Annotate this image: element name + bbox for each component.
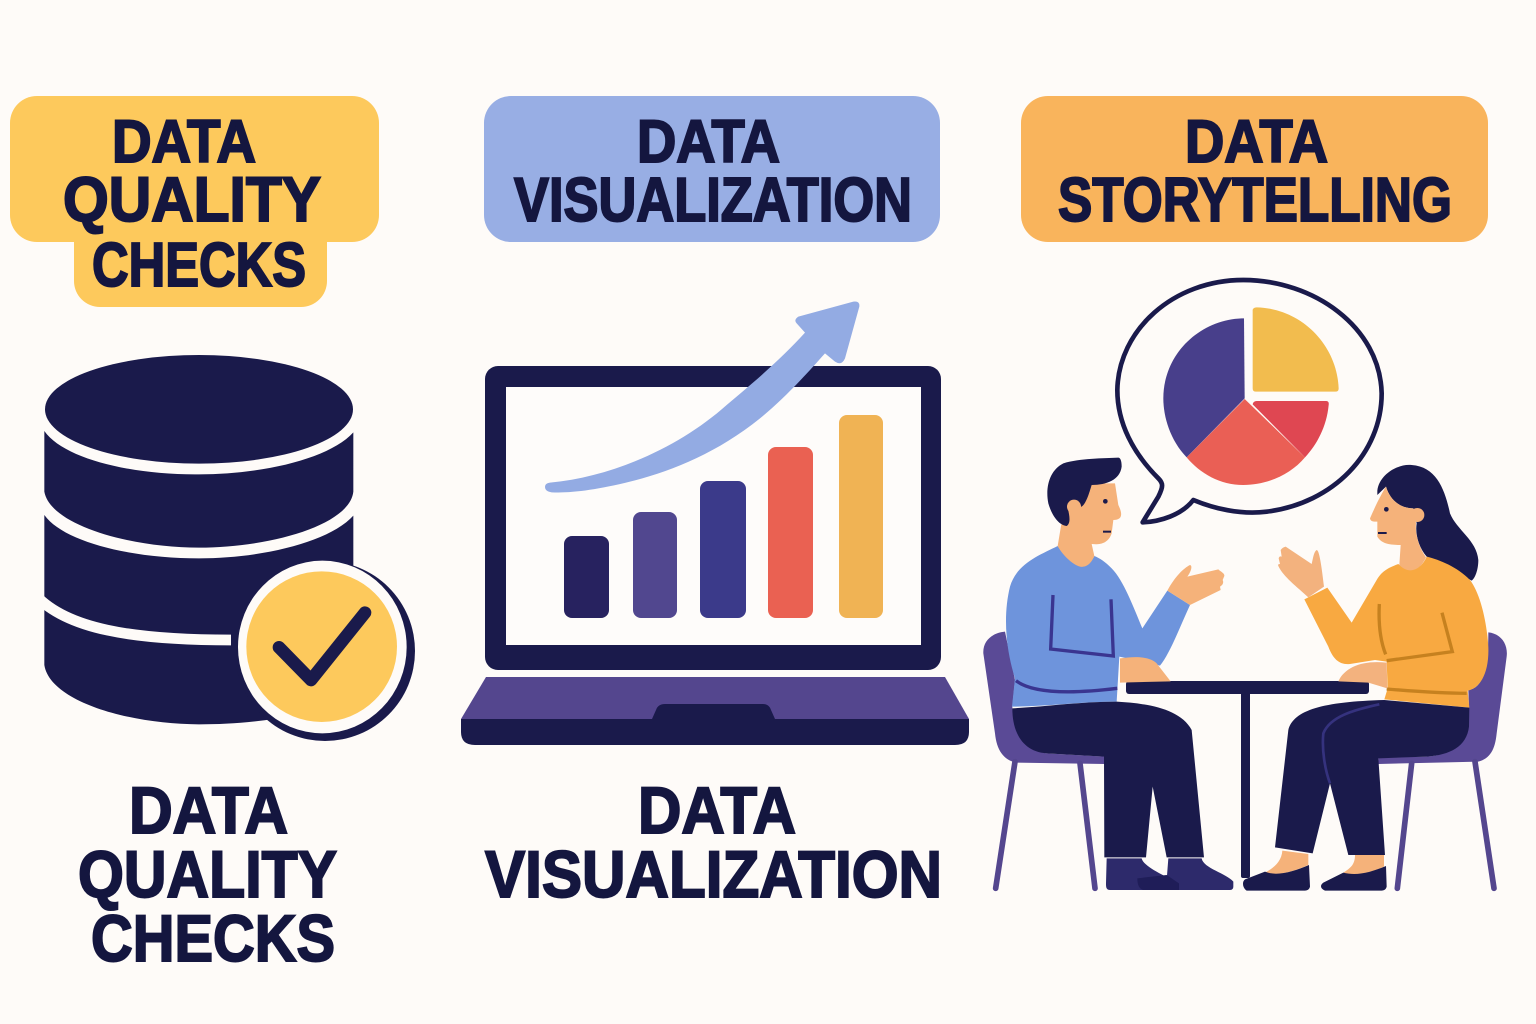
speech bubble with pie chart	[1117, 280, 1382, 522]
caption: data visualization: DATA	[638, 773, 796, 847]
heading badge: data storytelling: DATA	[1185, 108, 1328, 175]
heading badge: data quality checks: CHECKS	[92, 231, 306, 300]
heading badge: data visualization: VISUALIZATION	[514, 166, 912, 235]
caption: data quality checks: CHECKS	[91, 901, 335, 975]
heading badge: data storytelling: STORYTELLING	[1058, 166, 1452, 235]
bar chart	[564, 415, 883, 618]
heading badge: data quality checks: QUALITY	[63, 165, 321, 235]
heading badge: data quality checks	[10, 96, 379, 307]
panel: data storytelling	[983, 96, 1507, 891]
caption: data quality checks	[78, 773, 337, 975]
illustration: man seated on chair	[983, 458, 1233, 890]
heading badge: data visualization	[484, 96, 940, 242]
table	[1126, 681, 1369, 878]
arrow: upward trend	[545, 302, 859, 493]
caption: data quality checks: DATA	[129, 773, 288, 847]
heading badge: data visualization: DATA	[637, 108, 780, 175]
illustration: woman seated on chair	[1243, 465, 1507, 891]
icon: laptop	[461, 366, 969, 745]
heading badge: data storytelling	[1021, 96, 1488, 242]
icon: database with check badge	[36, 355, 415, 741]
panel: data visualization	[461, 96, 969, 911]
caption: data quality checks: QUALITY	[78, 837, 337, 911]
caption: data visualization	[485, 773, 942, 911]
heading badge: data quality checks: DATA	[112, 108, 256, 175]
panel: data quality checks	[10, 96, 415, 975]
caption: data visualization: VISUALIZATION	[485, 837, 942, 911]
